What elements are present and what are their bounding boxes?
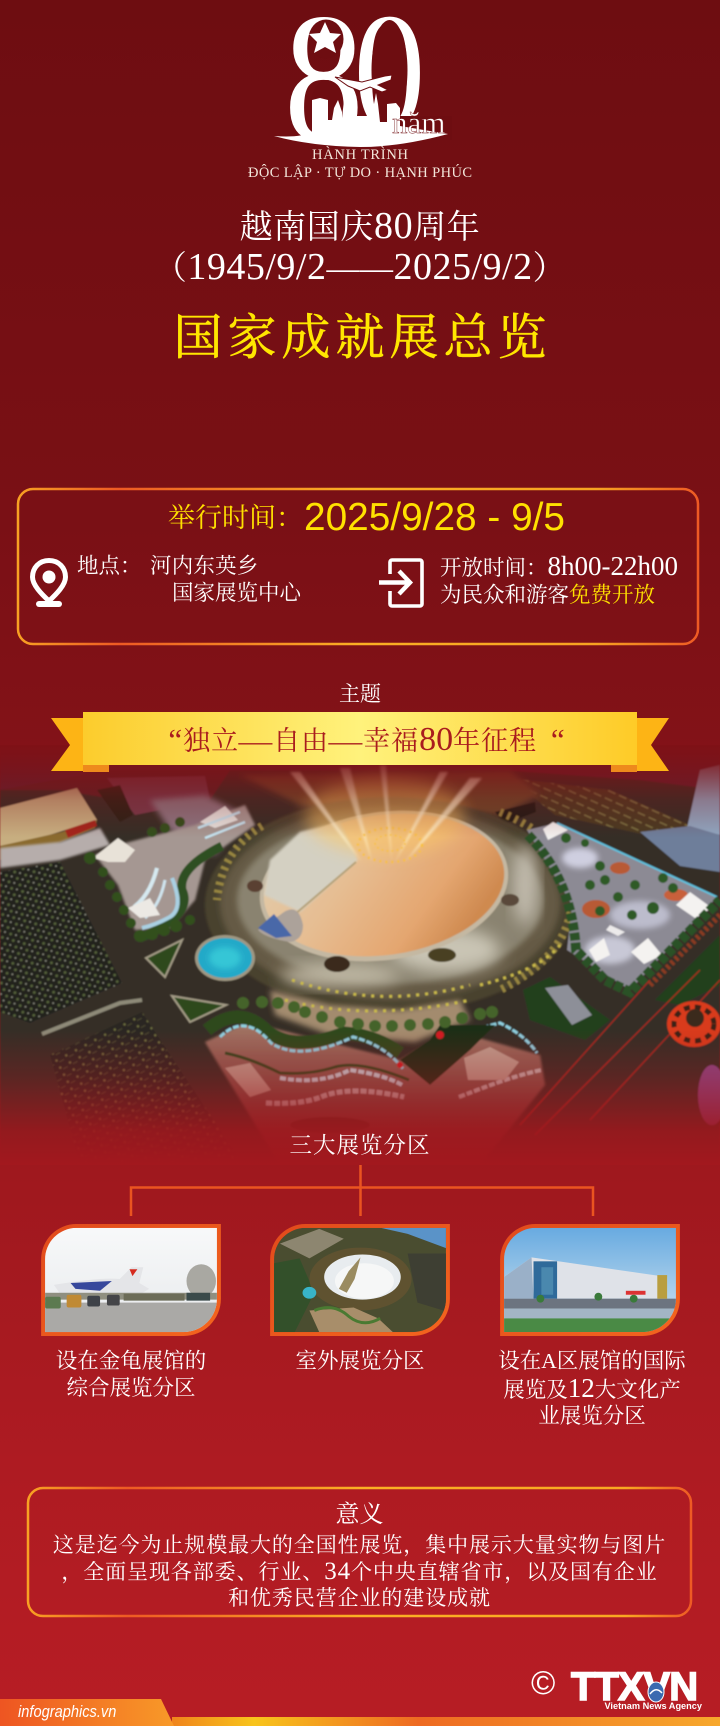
warm terrace under trees — [270, 990, 470, 1042]
logo: TTXVN: TTXVN — [571, 1665, 697, 1709]
zone 1 photo: aircraft and vehicles — [41, 1224, 221, 1336]
dome — [247, 795, 519, 977]
zone 3 caption — [498, 1349, 686, 1428]
row of hedges along plaza — [84, 817, 195, 942]
location text: 国家展览中心 — [172, 581, 301, 605]
zone 1 caption: 综合展览分区 — [66, 1376, 196, 1400]
plaza ring — [205, 797, 575, 1013]
panel: significance — [26, 1486, 692, 1618]
footer tab: infographics.vn — [0, 1699, 174, 1726]
numeral 80 — [284, 0, 425, 181]
terraced gardens — [205, 1017, 545, 1165]
parking lots — [0, 862, 122, 1023]
theme text: “独立 自由 幸福80年征程 “ — [168, 721, 566, 758]
location text — [77, 554, 301, 605]
theme label: 主题 — [339, 682, 381, 706]
zone 3 photo: exhibition hall — [500, 1224, 680, 1336]
zone 3 caption: 设在A区展馆的国际 — [498, 1349, 686, 1373]
fountain pool — [195, 935, 255, 981]
significance body — [53, 1533, 666, 1610]
hedge around right plaza — [528, 835, 720, 992]
banner: theme ribbon — [51, 712, 669, 772]
zone 2 caption: 室外展览分区 — [295, 1349, 424, 1373]
main heading: 国家成就展总览 — [173, 310, 552, 365]
carved loops of the numerals — [308, 20, 452, 140]
significance body: ，全面呈现各部委、行业、34个中央直辖省市，以及国有企业 — [61, 1558, 658, 1584]
road — [520, 970, 720, 1135]
right plaza with tents — [527, 822, 717, 990]
skyline — [274, 92, 448, 147]
section heading: three zones: 三大展览分区 — [289, 1133, 430, 1158]
event date: 举行时间： — [168, 503, 303, 533]
opening hours — [440, 551, 678, 607]
zone 3 caption: 展览及12大文化产 — [503, 1372, 681, 1402]
significance body: 和优秀民营企业的建设成就 — [228, 1586, 491, 1610]
garden block — [523, 977, 610, 1040]
title: （1945/9/2——2025/9/2） — [154, 246, 566, 288]
icon: globe — [648, 1682, 664, 1702]
upper blocks — [0, 745, 720, 868]
event date — [168, 496, 565, 539]
title — [154, 205, 566, 288]
location text: 河内东英乡 — [150, 554, 259, 578]
copyright mark: © — [531, 1664, 555, 1701]
balloons — [667, 1001, 720, 1125]
zone 1 caption: 设在金龟展馆的 — [56, 1349, 206, 1373]
photo: aerial view of the exhibition centre — [0, 758, 720, 1137]
nam text: năm — [392, 105, 445, 140]
light beams — [290, 765, 482, 862]
opening hours: 为民众和游客免费开放 — [440, 583, 655, 607]
logo: 80 years emblem — [248, 0, 472, 180]
connector lines — [130, 1165, 594, 1216]
location text: 地点： — [77, 554, 142, 578]
footer strip — [172, 1717, 720, 1726]
road and pool — [146, 935, 255, 1022]
zone 3 caption: 业展览分区 — [538, 1404, 646, 1428]
left plaza with tents — [93, 805, 255, 938]
significance heading: 意义 — [336, 1502, 384, 1528]
aeroplane — [335, 75, 392, 92]
slogan: HÀNH TRÌNH — [312, 146, 409, 163]
event date: 2025/9/28 - 9/5 — [304, 496, 565, 539]
icon: entrance arrow — [379, 558, 424, 608]
zone 2 photo: aerial render — [270, 1224, 450, 1336]
panel: event details — [16, 488, 700, 646]
opening hours: 开放时间：8h00-22h00 — [440, 551, 678, 581]
trees around south plaza — [237, 996, 498, 1032]
icon: location pin — [30, 558, 68, 607]
green strip — [655, 935, 720, 1005]
tower — [687, 765, 720, 835]
top and bottom fades — [0, 745, 720, 1165]
theme text: — — [329, 726, 364, 756]
star in the loop of the 8 — [309, 22, 341, 53]
logo: TTXVN: Vietnam News Agency — [604, 1701, 702, 1711]
ground — [0, 745, 720, 1165]
footer tab: infographics.vn: infographics.vn — [18, 1702, 116, 1721]
theme text: — — [239, 726, 274, 756]
significance body: 这是迄今为止规模最大的全国性展览，集中展示大量实物与图片 — [53, 1533, 666, 1557]
zone 1 caption — [56, 1349, 206, 1400]
title: 越南国庆80周年 — [240, 205, 480, 247]
